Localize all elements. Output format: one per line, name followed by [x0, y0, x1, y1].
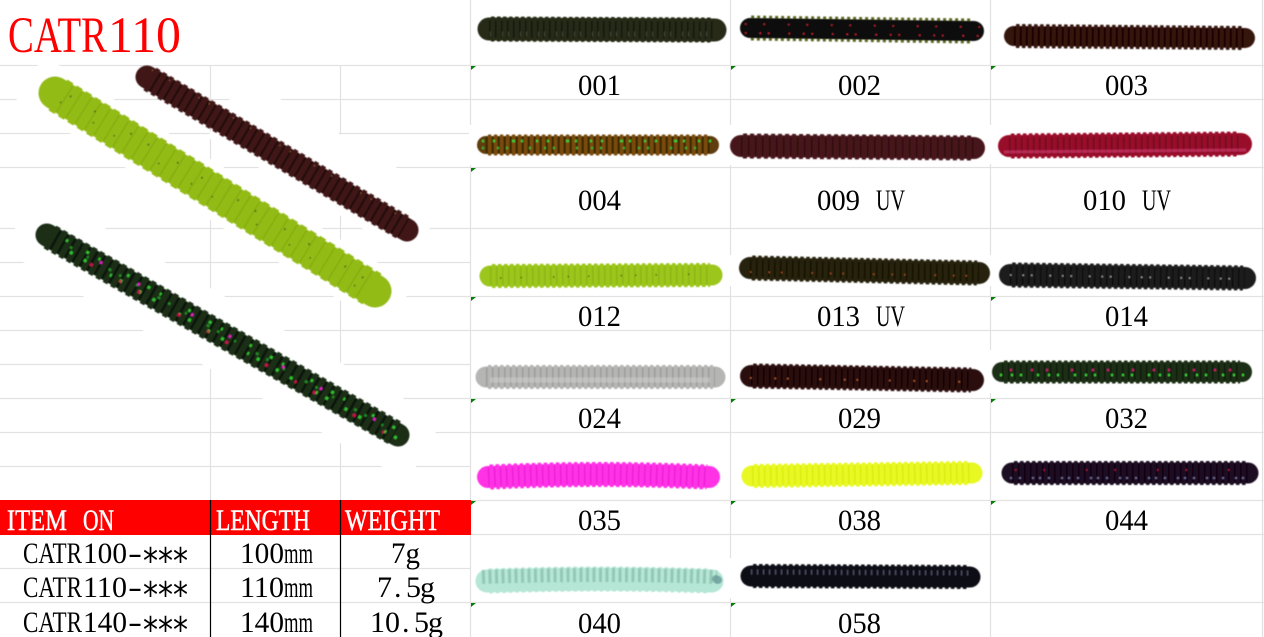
- comment markers: [471, 66, 996, 607]
- swatch 029: 029: [838, 402, 881, 435]
- table header: ON: [83, 504, 114, 537]
- swatch 035: 035: [578, 504, 621, 537]
- table row: CATR110: [23, 571, 435, 616]
- table header: WEIGHT: [345, 504, 440, 537]
- swatch 009 UV: UV: [876, 184, 905, 217]
- table row: CATR110: mm: [284, 571, 313, 604]
- swatch 010 UV: 010: [1083, 184, 1126, 217]
- large worm: dark green with flakes: [47, 235, 400, 440]
- swatch 013 UV: UV: [876, 300, 905, 333]
- title: CATR: [8, 8, 107, 64]
- table row: CATR140: [23, 606, 443, 637]
- swatch 002: 002: [838, 69, 881, 102]
- swatch 002: [745, 24, 980, 102]
- spec table: [0, 500, 471, 637]
- swatch 029: [750, 376, 975, 435]
- table header: LENGTH: [216, 504, 310, 537]
- table header: ITEM: [7, 504, 67, 537]
- swatch 024: 024: [578, 402, 621, 435]
- swatch 010 UV: UV: [1142, 184, 1171, 217]
- table row: CATR100: -: [128, 537, 142, 570]
- swatch 014: [1010, 275, 1245, 333]
- swatch 012: [490, 274, 712, 333]
- large worm: brown: [147, 70, 410, 230]
- table row: CATR100: mm: [284, 537, 313, 570]
- swatch 003: 003: [1105, 69, 1148, 102]
- swatch 013 UV: [750, 268, 980, 333]
- table row: CATR100: CATR: [23, 537, 82, 570]
- table row: CATR110: -: [128, 571, 142, 604]
- table row: CATR110: CATR: [23, 571, 82, 604]
- swatch 038: [752, 473, 972, 537]
- large worm: chartreuse: [55, 93, 375, 292]
- table row: CATR110: 7.5g: [377, 571, 435, 604]
- swatch 038: 038: [838, 504, 881, 537]
- table row: CATR100: 100: [83, 537, 127, 570]
- swatch 009 UV: 009: [817, 184, 860, 217]
- swatch 009 UV: [741, 146, 974, 217]
- table row: CATR100: ***: [143, 541, 188, 582]
- title: 110: [108, 8, 181, 64]
- swatch 012: 012: [578, 300, 621, 333]
- swatch 010 UV: [1004, 144, 1246, 217]
- table row: CATR110: 110: [83, 571, 127, 604]
- swatch 013 UV: 013: [817, 300, 860, 333]
- table row: CATR110: ***: [143, 575, 188, 616]
- swatch 032: 032: [1105, 402, 1148, 435]
- table header: [7, 504, 440, 537]
- table row: CATR110: 110: [240, 571, 284, 604]
- swatch 004: 004: [578, 184, 621, 217]
- swatch 014: 014: [1105, 300, 1148, 333]
- table row: CATR100: [23, 537, 420, 582]
- swatch 044: 044: [1105, 504, 1148, 537]
- table row: CATR100: 100: [240, 537, 284, 570]
- table row: CATR100: 7g: [391, 537, 420, 570]
- swatch 001: 001: [578, 69, 621, 102]
